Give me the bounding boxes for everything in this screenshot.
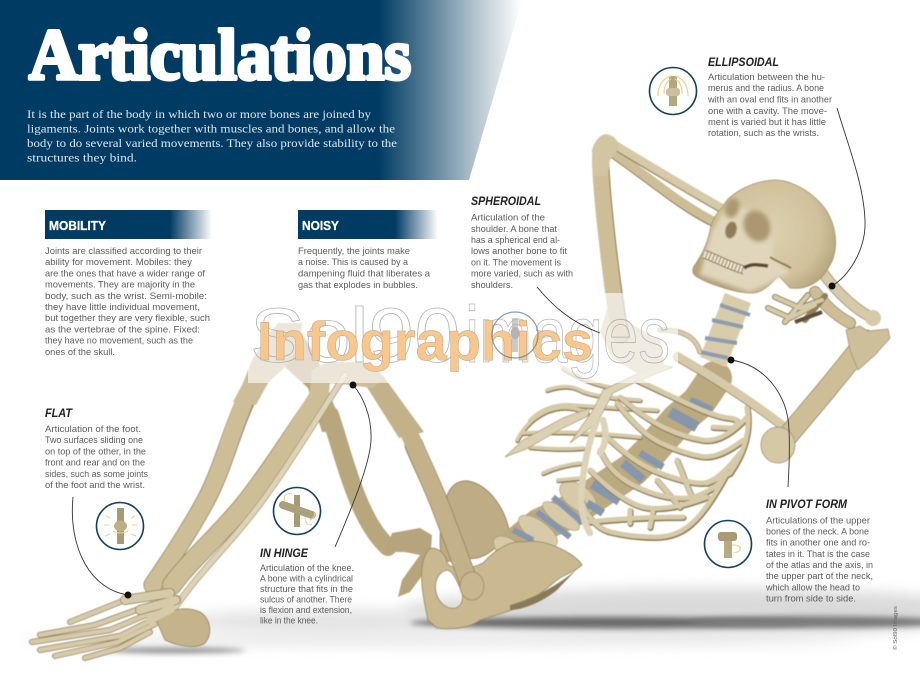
panel: in pivot form: of the atlas and the axis, in bbox=[766, 560, 873, 570]
clavicle and shoulder bbox=[600, 293, 783, 426]
panel: flat: on top of the other, in the bbox=[45, 446, 146, 456]
panel: mobility: Joints are classified according to their bbox=[45, 246, 202, 256]
foot bbox=[32, 593, 210, 658]
icon: spheroidal joint (faded) bbox=[492, 312, 538, 358]
sternum bbox=[570, 365, 673, 443]
panel: in hinge: like in the knee. bbox=[260, 616, 318, 626]
panel: flat: FLAT bbox=[45, 406, 74, 420]
bent arm right bbox=[761, 273, 890, 463]
far femur bbox=[285, 330, 432, 597]
callout line: in pivot form bbox=[728, 356, 789, 487]
panel: mobility: movements. They are majority in the bbox=[45, 280, 195, 290]
raised arm left bbox=[592, 134, 722, 335]
panel: flat: Articulation of the foot. bbox=[45, 424, 141, 434]
panel: mobility bbox=[45, 210, 212, 357]
panel: in hinge: sulcus of another. There bbox=[260, 594, 352, 604]
panel: ellipsoidal: Articulation between the hu- bbox=[708, 72, 825, 82]
panel: noisy: NOISY bbox=[302, 218, 339, 233]
panel: spheroidal: SPHEROIDAL bbox=[471, 194, 541, 208]
panel: in pivot form bbox=[765, 497, 873, 604]
panel: in hinge: is flexion and extension, bbox=[260, 605, 352, 615]
panel: flat: of the foot and the wrist. bbox=[45, 480, 145, 490]
panel: mobility: ones of the skull. bbox=[45, 347, 115, 357]
panel: flat bbox=[45, 406, 148, 490]
panel: ellipsoidal: ment is varied but it has little bbox=[708, 117, 826, 127]
intro text: It is the part of the body in which two or more bones are joined by bbox=[27, 107, 371, 121]
panel: in pivot form: the upper part of the neck, bbox=[766, 571, 873, 581]
panel: in pivot form: which allow the head to bbox=[765, 582, 860, 592]
panel: ellipsoidal: one with a cavity. The move- bbox=[708, 106, 827, 116]
callout line: ellipsoidal bbox=[828, 108, 865, 290]
panel: spheroidal: lows another bone to fit bbox=[471, 246, 567, 256]
panel: in hinge: IN HINGE bbox=[260, 546, 309, 560]
panel: spheroidal: shoulders. bbox=[471, 280, 513, 290]
header banner bbox=[0, 0, 522, 180]
near ribs bbox=[580, 380, 749, 538]
panel: mobility: but together they are very flexible, such bbox=[45, 313, 210, 323]
panel: ellipsoidal: with an oval end fits in another bbox=[707, 94, 832, 104]
panel: mobility: MOBILITY bbox=[49, 218, 106, 233]
neck vertebrae bbox=[700, 298, 750, 362]
watermark: Infographics: Infographics bbox=[257, 310, 593, 372]
panel: in hinge: Articulation of the knee. bbox=[260, 563, 354, 573]
icon: pivot joint bbox=[704, 520, 752, 568]
panel: ellipsoidal: merus and the radius. A bone bbox=[708, 83, 824, 93]
panel: spheroidal bbox=[471, 194, 573, 290]
panel: flat: sides, such as some joints bbox=[45, 469, 148, 479]
panel: in hinge: A bone with a cylindrical bbox=[260, 574, 353, 584]
tibia and fibula pair bbox=[153, 323, 385, 612]
intro text: body to do several varied movements. They also provide stability to the bbox=[27, 136, 397, 150]
panel: spheroidal: on it. The movement is bbox=[471, 258, 561, 268]
panel: spheroidal: more varied, such as with bbox=[471, 269, 573, 279]
callout line: flat bbox=[72, 497, 132, 598]
panel: in pivot form: IN PIVOT FORM bbox=[766, 497, 848, 511]
callout line: spheroidal bbox=[537, 287, 600, 333]
watermark: Sol90images outline bbox=[250, 290, 670, 379]
panel: spheroidal: Articulation of the bbox=[471, 212, 545, 222]
panel: mobility: they have little individual movement, bbox=[45, 302, 200, 312]
floor shadow bbox=[20, 588, 920, 653]
panel: noisy: Frequently, the joints make bbox=[298, 246, 410, 256]
panel: mobility: as the vertebrae of the spine. Fixed: bbox=[45, 324, 200, 334]
panel: noisy bbox=[298, 210, 438, 290]
panel: ellipsoidal: rotation, such as the wrists. bbox=[708, 128, 819, 138]
panel: ellipsoidal: ELLIPSOIDAL bbox=[708, 55, 779, 69]
panel: in pivot form: bones of the neck. A bone bbox=[766, 527, 869, 537]
eye sockets bbox=[723, 197, 776, 246]
icon: ellipsoidal joint bbox=[650, 68, 696, 114]
pelvis front bbox=[422, 541, 582, 629]
panel: mobility: body, such as the wrist. Semi-mobile: bbox=[45, 291, 207, 301]
skeleton illustration bbox=[32, 134, 890, 658]
panel: in pivot form: tates in it. That is the case bbox=[766, 549, 870, 559]
panel: noisy: gas that explodes in bubbles. bbox=[298, 280, 418, 290]
icon: hinge joint bbox=[274, 488, 320, 534]
panel: spheroidal: shoulder. A bone that bbox=[471, 224, 557, 234]
panel: flat: Two surfaces sliding one bbox=[45, 435, 143, 445]
intro text: ligaments. Joints work together with muscles and bones, and allow the bbox=[27, 122, 395, 136]
ilium back bbox=[440, 481, 509, 562]
watermark: Sol90images outline: Sol90 bbox=[250, 293, 460, 379]
watermark: Sol90images outline: images bbox=[465, 290, 670, 379]
panel: flat: front and rear and on the bbox=[45, 458, 145, 468]
far ribs bbox=[505, 368, 658, 481]
panel: spheroidal: has a spherical end al- bbox=[471, 235, 560, 245]
panel: ellipsoidal bbox=[707, 55, 832, 138]
panel: mobility: are the ones that have a wider range of bbox=[45, 268, 205, 278]
panel: mobility: ability for movement. Mobiles: they bbox=[45, 257, 192, 267]
panel: mobility: they have no movement, such as the bbox=[45, 336, 193, 346]
icon: flat joint bbox=[96, 502, 144, 550]
lumbar and thoracic spine bbox=[489, 378, 715, 569]
translucent watermark band bbox=[248, 293, 678, 383]
skull bbox=[693, 180, 836, 293]
intro text bbox=[27, 107, 397, 164]
panel: noisy: a noise. This is caused by a bbox=[298, 257, 409, 267]
panel: in hinge bbox=[260, 546, 354, 626]
hand bbox=[768, 295, 825, 322]
panel: in pivot form: turn from side to side. bbox=[766, 594, 856, 604]
title: Articulations bbox=[29, 15, 411, 95]
callout line: in hinge bbox=[335, 382, 371, 547]
panel: in pivot form: fits in another one and ro- bbox=[766, 538, 870, 548]
intro text: structures they bind. bbox=[27, 150, 137, 164]
panel: in pivot form: Articulations of the upper bbox=[766, 516, 870, 526]
credit: © Sol90 Images bbox=[892, 606, 899, 650]
panel: noisy: dampening fluid that liberates a bbox=[298, 269, 431, 279]
panel: in hinge: structure that fits in the bbox=[260, 584, 353, 594]
teeth bbox=[704, 254, 791, 270]
near femur bbox=[350, 362, 484, 600]
